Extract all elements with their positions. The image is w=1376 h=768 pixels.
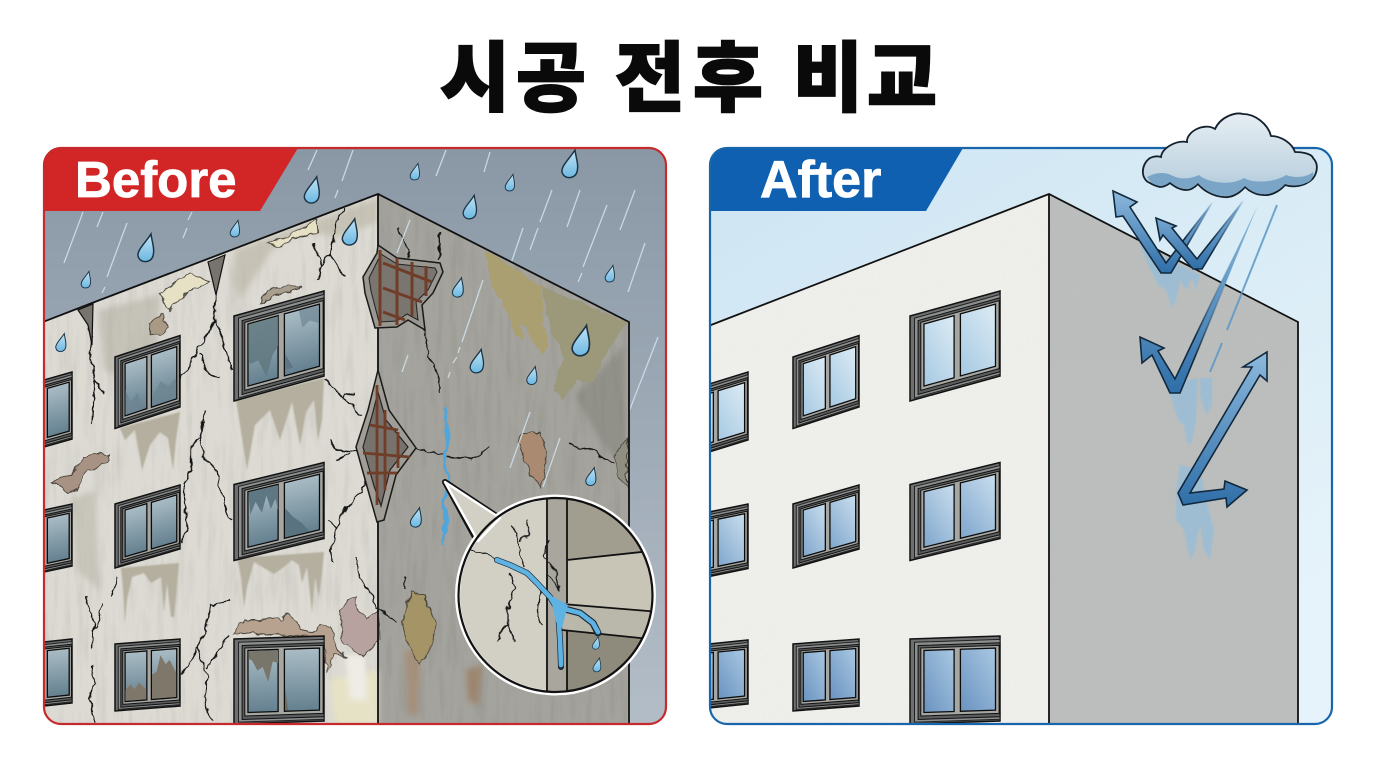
soft damp shadows [70,198,625,724]
before tag: Before [75,151,237,208]
building edges [30,194,629,730]
water leak crack [442,408,450,545]
after tag: After [760,151,881,209]
magnifier callout showing leaking crack [445,482,660,700]
side wall weathering [389,224,618,708]
stormy sky [44,148,666,724]
wall texture [710,194,1298,724]
panel: after [680,114,1332,730]
after panel border [710,148,1332,724]
water-stain drips under windows [120,378,324,623]
raindrops [56,150,615,527]
windows: rows of clean windows [680,291,1000,724]
before scene [16,148,666,730]
peeling patches and stains [52,220,627,673]
windows: rows of damaged windows [16,291,324,724]
rain streaks in sky [64,150,658,427]
beading water stains on wall [1140,245,1214,560]
building edges [680,194,1298,730]
before panel border [44,148,666,724]
icon: cloud [1143,114,1317,197]
corner spall with rebar, upper [363,245,443,330]
rain over walls [397,220,560,487]
arrow: water deflected at roof edge, right [1156,201,1243,269]
front wall [30,194,378,730]
cracks in the walls [85,208,613,722]
front wall weathering [44,194,378,724]
panel: before [16,148,666,730]
clear sky [710,148,1332,724]
after scene [680,148,1332,730]
after tag [710,148,963,211]
repaired side wall [1049,194,1298,730]
arrow: water deflected mid wall [1140,205,1258,393]
arrow: water deflected at roof edge, left [1113,191,1212,273]
repaired front wall [711,196,1048,723]
side wall [378,194,629,730]
roof wedge cracks [78,255,225,345]
before tag [44,148,298,211]
corner spall with rebar, middle [356,370,416,522]
rain streaks repelled [1210,205,1277,372]
arrow: water deflected lower wall [1178,352,1267,507]
title: 시공 전후 비교 [440,37,937,122]
